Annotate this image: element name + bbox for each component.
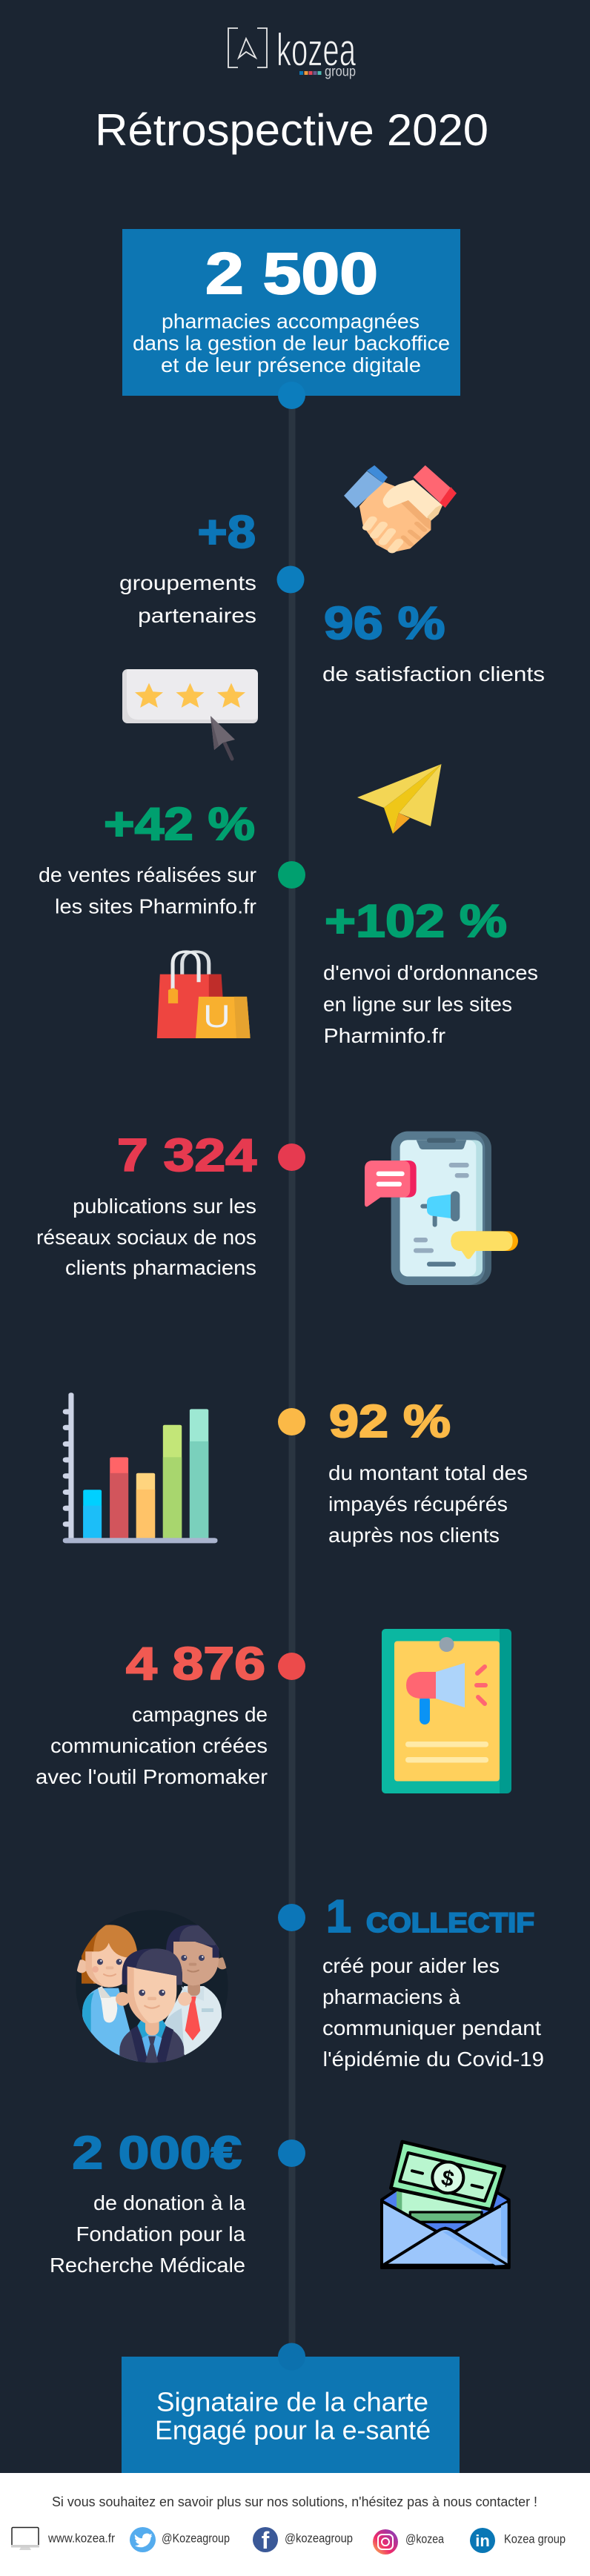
timeline dot: 1 collectif [278, 1904, 305, 1931]
stat: 7 324: réseaux sociaux de nos [36, 1226, 256, 1249]
icon: handshake [344, 465, 457, 553]
contact: instagram: @kozea [405, 2532, 444, 2546]
stat: 4 876: campagnes de [132, 1703, 268, 1726]
stat: 4 876 [36, 1639, 268, 1788]
icon: megaphone poster [382, 1629, 511, 1793]
stat: 4 876: 4 876 [126, 1639, 265, 1690]
stat: +42 %: les sites Pharminfo.fr [55, 895, 256, 917]
stat: +8 groupements: groupements [119, 571, 256, 594]
icon: pink speech bubble [365, 1161, 417, 1206]
contact: facebook: f [262, 2527, 270, 2554]
stat: 1 collectif: COLLECTIF [366, 1908, 534, 1938]
stat: +42 %: +42 % [104, 799, 255, 850]
icon: paper plane [357, 764, 442, 834]
timeline dot: bottom [278, 2343, 305, 2370]
timeline dot: 4 876 [278, 1653, 305, 1680]
stat: 1 collectif: pharmaciens à [322, 1985, 460, 2008]
panel: contact footer [0, 2473, 590, 2576]
stat: 92 %: impayés récupérés [328, 1493, 508, 1516]
stat: 4 876: communication créées [50, 1734, 268, 1757]
stat: 1 collectif: 1 [326, 1891, 351, 1942]
stat: 1 collectif: l'épidémie du Covid-19 [323, 2048, 544, 2071]
contact: website [11, 2527, 115, 2550]
charter text [155, 2386, 431, 2446]
icon: team of three people [77, 1925, 227, 2063]
icon: megaphone [420, 1191, 460, 1227]
stat: 2 000 euros: Recherche Médicale [50, 2254, 245, 2277]
icon: phone with speech bubbles [365, 1132, 518, 1285]
person: man in suit [116, 1948, 192, 2068]
banknote: $ [439, 2165, 457, 2192]
timeline dot: +8 [277, 566, 304, 593]
panel: top headline box [122, 229, 460, 396]
stat: 2 000 euros: 2 000€ [73, 2128, 242, 2179]
stat: 96 %: de satisfaction clients [322, 663, 545, 686]
stat: +42 %: de ventes réalisées sur [39, 863, 256, 886]
stat: +102 %: +102 % [325, 896, 507, 947]
banknote [391, 2142, 505, 2210]
icon: star rating card [122, 669, 258, 759]
logo: Kozea group [228, 25, 356, 80]
timeline dot: top [278, 382, 305, 409]
stat: +8 groupements: partenaires [138, 604, 256, 627]
headline description: dans la gestion de leur backoffice [133, 332, 450, 354]
stat: 2 000 euros: de donation à la [93, 2191, 245, 2214]
stat: 1 collectif [322, 1891, 544, 2071]
stat: +8 groupements [119, 507, 256, 627]
stat: 7 324 [36, 1130, 257, 1279]
stat: 4 876: avec l'outil Promomaker [36, 1765, 268, 1788]
contact: linkedin [470, 2528, 566, 2553]
stat: +102 %: d'envoi d'ordonnances [323, 961, 538, 984]
charter text: Engagé pour la e-santé [155, 2414, 431, 2446]
logo: Kozea group: kozea [276, 25, 356, 76]
icon: shopping bags [157, 952, 251, 1038]
icon: yellow speech bubble [451, 1231, 518, 1259]
stat: 7 324: publications sur les [73, 1195, 256, 1218]
stat: 2 000 euros: Fondation pour la [76, 2223, 245, 2245]
stat: +42 % [39, 799, 256, 917]
contact: website: www.kozea.fr [47, 2532, 115, 2545]
timeline dot: 92 % [278, 1408, 305, 1435]
stat: 1 collectif: créé pour aider les [322, 1954, 500, 1977]
stat: +102 % [323, 896, 538, 1047]
stat: +8 groupements: +8 [197, 507, 256, 558]
icon: bar chart [63, 1392, 217, 1543]
stat: 7 324: 7 324 [117, 1130, 257, 1181]
icon: cursor [211, 716, 235, 759]
headline description: pharmacies accompagnées [162, 310, 420, 333]
stat: 92 %: 92 % [329, 1396, 451, 1447]
title: Rétrospective 2020 [95, 105, 488, 155]
panel: closing charter box [122, 2357, 460, 2473]
stat: 1 collectif: communiquer pendant [322, 2016, 541, 2039]
stat: 2 000 euros [50, 2128, 245, 2277]
contact: linkedin: in [475, 2532, 490, 2550]
footer message: Si vous souhaitez en savoir plus sur nos solutions, n'hésitez pas à nous contacter ! [52, 2494, 537, 2509]
contact: twitter: @Kozeagroup [162, 2532, 230, 2545]
headline number: 2 500 [205, 240, 378, 306]
stat: 96 %: 96 % [324, 598, 445, 649]
headline description: et de leur présence digitale [161, 353, 421, 376]
stat: 92 % [328, 1396, 528, 1547]
timeline dot: +42 % [278, 861, 305, 889]
charter text: Signataire de la charte [156, 2386, 428, 2417]
timeline dot: 7 324 [278, 1143, 305, 1171]
stat: +102 %: en ligne sur les sites [323, 993, 512, 1015]
timeline dot: 2 000 euros [278, 2140, 305, 2167]
stat: 96 % [322, 598, 545, 686]
stat: 92 %: du montant total des [328, 1461, 528, 1484]
contact: twitter [130, 2527, 230, 2552]
contact: facebook [253, 2527, 353, 2554]
person: man with red tie [165, 1919, 228, 2058]
stat: 92 %: auprès nos clients [328, 1524, 500, 1547]
contact: instagram [373, 2529, 444, 2555]
logo: Kozea group: group [325, 64, 356, 80]
stat: 7 324: clients pharmaciens [65, 1256, 256, 1279]
headline description [133, 310, 450, 376]
person: woman [76, 1925, 139, 2062]
icon: envelope with banknote [382, 2142, 509, 2268]
contact: facebook: @kozeagroup [285, 2532, 353, 2545]
stat: +102 %: Pharminfo.fr [323, 1024, 445, 1047]
contact: linkedin: Kozea group [504, 2532, 566, 2546]
